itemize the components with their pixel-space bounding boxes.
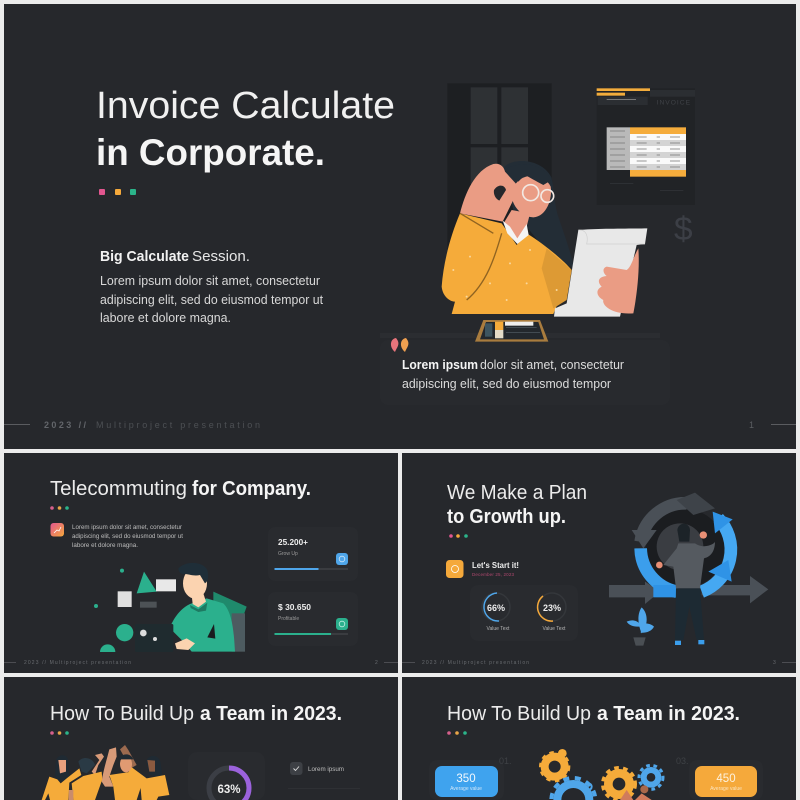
icon: trend badge — [50, 523, 64, 536]
laptop logo dots — [140, 630, 157, 641]
small blue cog — [585, 783, 592, 790]
title: in Corporate. — [96, 132, 325, 173]
invoice document — [597, 88, 695, 205]
face — [512, 176, 551, 217]
donut card — [188, 752, 265, 800]
value card: 350 — [429, 760, 504, 800]
cycle ring blue left — [641, 548, 677, 592]
text block: session intro: labore et dolore magna. — [100, 310, 231, 325]
stat card: grow up: Grow Up — [278, 551, 298, 557]
shirt collar — [190, 603, 207, 612]
ring: 66 percent: 66% — [487, 603, 505, 613]
footer: Multiproject presentation — [96, 420, 260, 430]
value card: 350: 350 — [456, 773, 476, 785]
checklist item — [288, 762, 360, 789]
gear blue small — [639, 765, 663, 789]
person one — [42, 755, 81, 800]
ring: 23 percent — [538, 593, 566, 632]
sweater fold — [542, 248, 572, 308]
right arrow — [702, 576, 768, 603]
footer: 1 — [749, 420, 754, 430]
blue arrowheads — [708, 512, 733, 582]
neck — [504, 210, 530, 241]
paper note — [156, 579, 176, 591]
quote card: Lorem ipsum — [402, 357, 478, 372]
accent dots — [99, 189, 136, 195]
sweater — [442, 213, 572, 314]
cycle centre — [646, 509, 724, 588]
arm and raised hand — [460, 164, 519, 222]
plant pot — [633, 637, 646, 646]
ring: 66 percent: Value Text — [487, 626, 510, 632]
stat card: profitable: Profitable — [278, 616, 299, 622]
panel: team building — [4, 677, 398, 800]
start text: Let's Start it! — [472, 561, 519, 570]
text block: labore et dolore magna. — [72, 542, 138, 549]
hands — [175, 638, 195, 650]
cycle ring grey — [641, 503, 687, 542]
footer: 2023 // Multiproject presentation — [422, 660, 529, 666]
ring: 23 percent: 23% — [543, 603, 561, 613]
man jacket — [663, 542, 715, 588]
shoes — [675, 640, 704, 645]
stat card: grow up — [268, 527, 358, 581]
start text — [472, 561, 519, 577]
shirt — [170, 598, 235, 652]
person two — [69, 753, 104, 800]
panel: telecommuting — [4, 453, 398, 673]
glasses — [523, 185, 554, 202]
hair — [178, 563, 208, 583]
finger gap — [494, 186, 506, 201]
text block: session intro: Big Calculate — [100, 248, 189, 265]
bolt orange — [558, 749, 567, 758]
laptop — [135, 624, 173, 652]
text block: session intro — [100, 248, 323, 325]
illustration: team high five — [42, 745, 169, 800]
person three — [102, 747, 143, 800]
text block: adipiscing elit, sed do eiusmod tempor ut — [72, 533, 183, 540]
ring: 66 percent — [482, 593, 510, 632]
donut card: 63% — [217, 784, 241, 796]
hands — [656, 531, 707, 568]
dollar sign: $ — [674, 211, 693, 248]
accent dots — [50, 731, 69, 735]
cycle ring blue right — [702, 518, 731, 592]
face — [183, 568, 207, 599]
text block: session intro: adipiscing elit, sed do eiusmod tempor ut — [100, 292, 323, 307]
heading: How To Build Up — [447, 703, 591, 725]
quote marks — [391, 338, 408, 352]
value card — [470, 585, 578, 641]
heading: a Team in 2023. — [597, 703, 740, 725]
illustration: man at laptop — [94, 563, 247, 652]
chair — [213, 592, 247, 630]
horizontal arrow — [609, 582, 660, 604]
heading: a Team in 2023. — [200, 703, 342, 725]
person — [620, 790, 652, 800]
checklist item: Lorem ipsum — [308, 767, 344, 773]
title: Invoice Calculate — [96, 85, 395, 127]
gear orange large — [603, 768, 635, 800]
arm gap — [207, 624, 215, 639]
value card: 350: Average value — [450, 786, 482, 792]
stat card: profitable: $ 30.650 — [278, 602, 311, 612]
text block: session intro: Lorem ipsum dolor sit amet, consectetur — [100, 273, 321, 288]
footer: 2023 // — [44, 420, 88, 430]
footer: 2023 // Multiproject presentation — [24, 660, 131, 666]
invoice document: INVOICE — [657, 100, 691, 107]
arrowhead grey left — [632, 530, 657, 548]
accent dots — [50, 506, 69, 510]
heading — [447, 482, 587, 528]
neck — [192, 593, 206, 607]
heading — [50, 703, 342, 725]
value card: 450 — [689, 760, 763, 800]
stat card: profitable — [268, 592, 358, 646]
plant leaves — [627, 607, 654, 633]
footer: 3 — [773, 660, 776, 666]
heading: for Company. — [192, 478, 311, 500]
quote card — [380, 340, 670, 405]
man head — [677, 524, 690, 542]
footer — [4, 420, 796, 430]
value card: 450: Average value — [710, 786, 742, 792]
panel: main invoice slide — [4, 4, 796, 449]
person four — [120, 745, 169, 800]
panel: team values and gears — [402, 677, 796, 800]
step label 01: 01. — [499, 756, 512, 766]
blue band — [653, 585, 677, 597]
fringe — [504, 164, 552, 185]
floating dots — [94, 569, 124, 608]
paper — [554, 228, 647, 317]
quote card: adipiscing elit, sed do eiusmod tempor — [402, 376, 612, 391]
start text: December 25, 2023 — [472, 572, 514, 577]
clipboard — [118, 591, 132, 607]
lamp — [137, 572, 157, 593]
text block: Lorem ipsum dolor sit amet, consectetur — [72, 524, 183, 531]
accent dots — [449, 534, 468, 538]
calculator — [475, 320, 548, 342]
gear orange small — [541, 753, 569, 781]
step label 03: 03. — [676, 756, 689, 766]
illustration: gears — [541, 749, 663, 800]
stat card: grow up: 25.200+ — [278, 537, 308, 547]
chair back — [232, 613, 245, 652]
sweater dots — [452, 249, 558, 301]
title — [96, 85, 395, 173]
window — [447, 83, 552, 250]
gear blue large — [551, 778, 595, 800]
gear shape — [657, 523, 703, 570]
illustration: man at cycle arrows — [609, 493, 768, 646]
hand holding paper — [597, 248, 639, 314]
collar — [503, 221, 529, 244]
heading: Telecommuting — [50, 478, 187, 500]
sleeve line — [460, 213, 502, 300]
text block: session intro: Session. — [192, 248, 250, 265]
table edge — [380, 333, 660, 338]
icon: home badge — [446, 560, 464, 578]
plant — [116, 624, 133, 641]
heading: We Make a Plan — [447, 482, 587, 504]
value card: 450: 450 — [716, 773, 736, 785]
quote card: dolor sit amet, consectetur — [480, 357, 625, 372]
illustration: woman reading invoice — [442, 83, 695, 342]
accent dots — [447, 731, 467, 735]
plant dome — [100, 644, 115, 652]
heading: How To Build Up — [50, 703, 194, 725]
person head — [640, 785, 648, 793]
heading — [50, 478, 311, 500]
hair — [503, 161, 574, 267]
heading — [447, 703, 740, 725]
footer — [4, 660, 398, 666]
footer: 2 — [375, 660, 378, 666]
device — [140, 602, 157, 608]
ring: 23 percent: Value Text — [543, 626, 566, 632]
man legs — [675, 588, 704, 640]
arrowhead grey top — [677, 493, 715, 515]
text block — [72, 524, 183, 549]
paper curl — [578, 230, 645, 244]
footer — [402, 660, 796, 666]
heading: to Growth up. — [447, 506, 566, 528]
panel: growth plan — [402, 453, 796, 673]
